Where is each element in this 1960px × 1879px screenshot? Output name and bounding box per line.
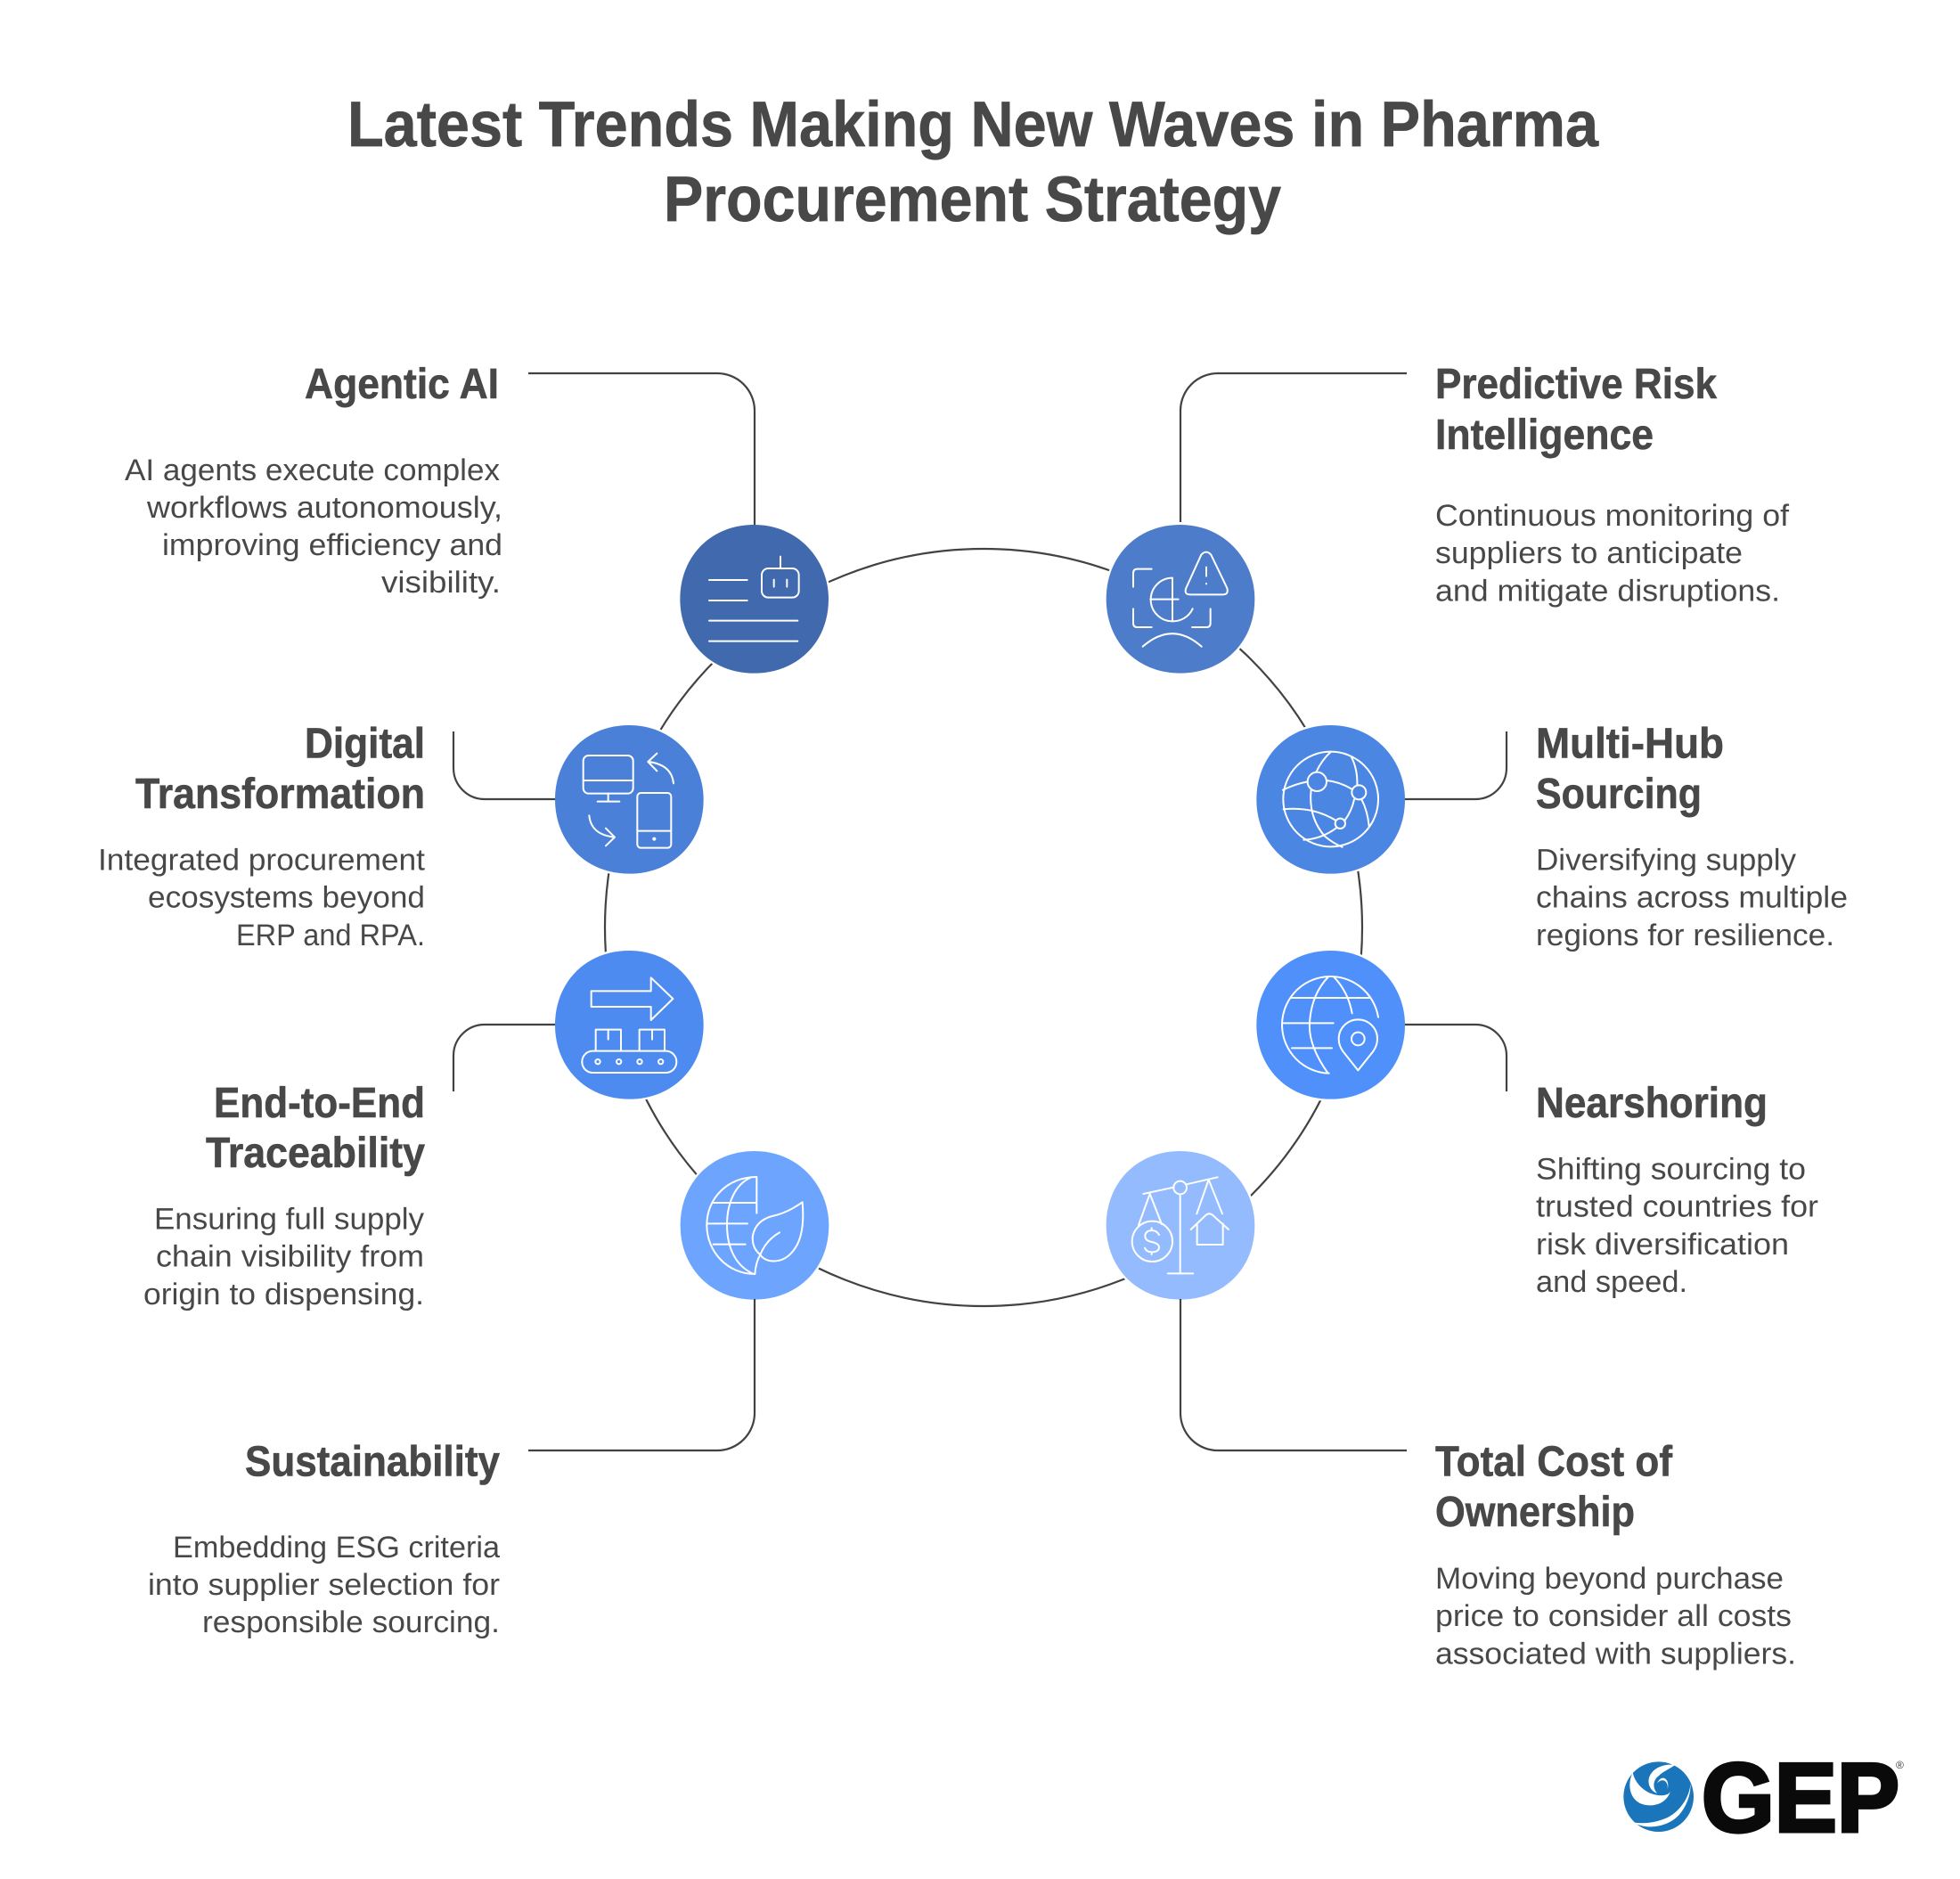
description: and mitigate disruptions. (1435, 574, 1780, 608)
description: price to consider all costs (1435, 1599, 1792, 1633)
description (1536, 1153, 1818, 1299)
description: ecosystems beyond (148, 880, 425, 914)
panel: Digital Transformation (98, 720, 426, 952)
description (1435, 499, 1790, 608)
heading (206, 1080, 425, 1177)
heading: Intelligence (1435, 412, 1654, 459)
description: improving efficiency and (162, 528, 502, 562)
node: Agentic AI icon (680, 525, 829, 674)
panel: Sustainability (148, 1438, 500, 1639)
heading: Digital (305, 720, 425, 768)
panel: End-to-End Traceability (143, 1080, 425, 1311)
description (148, 1531, 500, 1639)
node: Multi-Hub Sourcing icon (1256, 725, 1405, 874)
heading: Nearshoring (1536, 1080, 1768, 1127)
panel: Agentic AI (125, 361, 502, 600)
heading (135, 720, 425, 818)
heading: Agentic AI (305, 361, 499, 408)
description: suppliers to anticipate (1435, 536, 1743, 570)
connector: Digital Transformation (453, 731, 555, 799)
icon: blue swirl (1623, 1761, 1694, 1832)
description: into supplier selection for (148, 1568, 500, 1602)
description: associated with suppliers. (1435, 1638, 1796, 1671)
connector: Nearshoring (1405, 1025, 1507, 1091)
connector: Agentic AI (528, 373, 755, 525)
description: Ensuring full supply (154, 1203, 424, 1237)
heading: Total Cost of (1435, 1438, 1673, 1486)
node: End-to-End Traceability icon (555, 951, 704, 1099)
description: Moving beyond purchase (1435, 1562, 1784, 1596)
description: workflows autonomously, (146, 491, 502, 525)
description: chain visibility from (156, 1240, 424, 1274)
node: Digital Transformation icon (555, 725, 704, 874)
heading: Ownership (1435, 1489, 1635, 1536)
central ring (605, 549, 1362, 1306)
heading (1435, 361, 1717, 459)
logo: GEP (1623, 1743, 1904, 1853)
node: Sustainability icon (681, 1151, 829, 1300)
description (98, 843, 426, 952)
description: risk diversification (1536, 1228, 1789, 1262)
heading (1536, 720, 1724, 818)
connector: Multi-Hub Sourcing (1405, 731, 1507, 799)
connector: Predictive Risk Intelligence (1180, 373, 1407, 522)
description: origin to dispensing. (143, 1278, 424, 1311)
node: Predictive Risk Intelligence icon (1107, 525, 1254, 674)
heading: End-to-End (214, 1080, 425, 1127)
description: Diversifying supply (1536, 843, 1796, 877)
description: visibility. (381, 566, 501, 600)
heading: Sourcing (1536, 771, 1702, 818)
description: regions for resilience. (1536, 919, 1834, 952)
panel: Nearshoring (1536, 1080, 1818, 1299)
connector: Sustainability (528, 1299, 755, 1450)
description: Shifting sourcing to (1536, 1153, 1806, 1187)
description: Embedding ESG criteria (173, 1531, 500, 1564)
title (347, 89, 1599, 235)
heading: Multi-Hub (1536, 720, 1724, 768)
description (143, 1203, 424, 1311)
node: Total Cost of Ownership icon (1107, 1151, 1254, 1300)
description: ERP and RPA. (236, 919, 425, 952)
heading: Predictive Risk (1435, 361, 1717, 408)
heading: Sustainability (245, 1438, 500, 1486)
heading: Transformation (135, 771, 425, 818)
description (125, 453, 502, 600)
registered mark: ® (1896, 1759, 1904, 1771)
description: responsible sourcing. (202, 1605, 500, 1639)
heading: Traceability (206, 1130, 425, 1177)
description: Integrated procurement (98, 843, 426, 877)
description: AI agents execute complex (125, 453, 500, 487)
description (1435, 1562, 1796, 1671)
title: Procurement Strategy (664, 164, 1281, 235)
title: Latest Trends Making New Waves in Pharma (347, 89, 1599, 160)
panel: Predictive Risk Intelligence (1435, 361, 1790, 608)
description (1536, 843, 1848, 952)
description: chains across multiple (1536, 880, 1848, 914)
description: trusted countries for (1536, 1190, 1818, 1224)
heading (1435, 1438, 1673, 1536)
connector: End-to-End Traceability (453, 1025, 555, 1091)
connector: Total Cost of Ownership (1180, 1299, 1407, 1450)
panel: Multi-Hub Sourcing (1536, 720, 1848, 952)
description: and speed. (1536, 1265, 1687, 1299)
node: Nearshoring icon (1256, 951, 1405, 1099)
description: Continuous monitoring of (1435, 499, 1790, 533)
wordmark: GEP (1702, 1743, 1899, 1853)
panel: Total Cost of Ownership (1435, 1438, 1796, 1671)
